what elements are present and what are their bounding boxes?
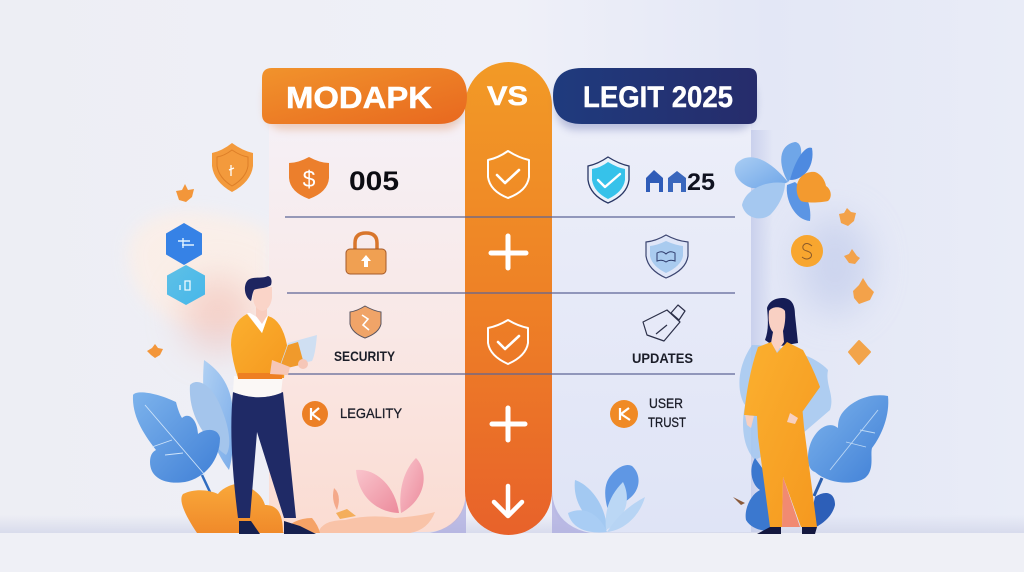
row dividers	[285, 217, 735, 374]
central vs column	[465, 62, 552, 535]
label: security: SECURITY	[334, 348, 396, 364]
man neck	[256, 306, 267, 324]
text: garbled 2025 label: 25	[687, 169, 715, 196]
text: 005: 005	[349, 166, 399, 196]
man hair	[245, 276, 272, 301]
icon: center plus 1	[491, 236, 526, 268]
vs label: VS	[487, 81, 528, 111]
man head	[253, 287, 272, 311]
character: woman	[744, 298, 820, 534]
panel: modapk column	[269, 124, 466, 532]
tablet	[279, 335, 317, 368]
heading: legit 2025: LEGIT 2025	[583, 81, 733, 114]
woman jumpsuit	[744, 342, 820, 527]
icon: center shield check 2	[488, 320, 528, 364]
illustration: peach mound	[318, 512, 435, 533]
panel: legit column	[552, 124, 751, 532]
man trousers	[231, 392, 296, 518]
man forearm and hand	[270, 360, 290, 375]
man shirt hem	[233, 376, 283, 397]
icon: orange cloud badge	[797, 172, 831, 202]
label: updates: UPDATES	[632, 350, 693, 366]
man collar	[247, 313, 268, 333]
corner shade	[430, 490, 590, 533]
icon: center shield check 1	[488, 151, 529, 198]
icon: orange dollar shield: $	[303, 166, 316, 192]
illustration: left leaves	[133, 360, 233, 492]
illustration: pink leaves	[333, 458, 424, 519]
icon: updates tag	[643, 305, 685, 341]
icon: cyan hexagon	[167, 265, 205, 305]
header: modapk	[262, 68, 467, 130]
icon: coin	[791, 235, 823, 267]
icon: down arrow	[494, 486, 522, 516]
icon: user trust badge	[610, 400, 638, 428]
illustration: orange ground patch	[283, 518, 320, 533]
icon: security shield	[350, 306, 381, 338]
header: legit 2025	[553, 68, 757, 130]
text: garbled 2025 label	[646, 169, 715, 196]
man shoes	[239, 521, 316, 534]
illustration: right plant	[733, 345, 888, 531]
icon: orange diamond	[849, 341, 870, 364]
woman shoes	[757, 527, 817, 534]
illustration: orange bush	[181, 484, 283, 533]
label: legality: LEGALITY	[340, 405, 403, 421]
label: user trust: TRUST	[648, 414, 686, 430]
icon: blue check shield	[588, 157, 629, 203]
icon: padlock	[346, 233, 386, 274]
icon: center plus 2	[492, 408, 525, 440]
icon: small orange stars left	[147, 184, 194, 358]
heading: modapk: MODAPK	[286, 80, 433, 115]
icon: legality badge	[302, 401, 328, 427]
label: user trust: USER	[649, 395, 683, 411]
woman salmon inner leg	[782, 477, 800, 527]
character: man	[231, 276, 317, 534]
icon: small outline shield	[646, 235, 688, 278]
label: user trust	[648, 395, 686, 430]
icon: blue hexagon	[166, 223, 202, 265]
illustration: blue flower	[735, 142, 813, 221]
icon: orange dollar shield	[289, 157, 329, 199]
woman hair	[765, 298, 798, 347]
illustration: right small leaves	[568, 465, 645, 532]
woman face and neck	[769, 307, 785, 352]
woman hands	[745, 413, 798, 428]
icon: small orange leaves right	[839, 208, 874, 304]
man sweater	[231, 314, 287, 378]
icon: orange shield decoration	[212, 143, 253, 192]
